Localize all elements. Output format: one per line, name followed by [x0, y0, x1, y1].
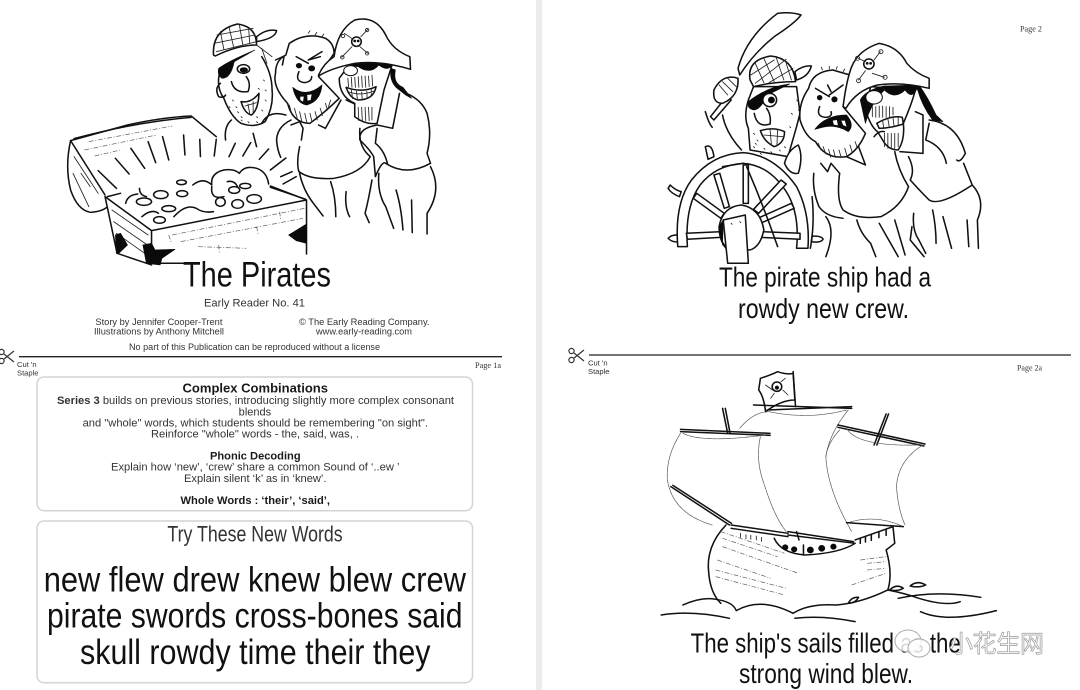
icon: pirate with cap and eyepatch	[213, 24, 286, 147]
icon: scissors	[0, 349, 14, 364]
heading: complex combinations: Complex Combinations	[182, 381, 328, 395]
cut label: Staple	[588, 367, 610, 376]
body text: series description: Series 3 builds on previous stories, introducing slightly more complex consonant	[57, 395, 454, 407]
body text: reinforce: Reinforce "whole" words - the, said, was, .	[151, 428, 359, 440]
word row 3: skull rowdy time their they	[80, 633, 431, 672]
watermark	[895, 630, 1044, 658]
cut label: Staple	[17, 368, 39, 378]
page number: Page 2	[1020, 25, 1042, 34]
whole words line: Whole Words : ‘their’, ‘said’,	[180, 495, 330, 507]
icon: waves	[661, 583, 996, 622]
page number: Page 2a	[1017, 364, 1042, 373]
panel: try these new words	[37, 521, 472, 683]
icon: scissors	[569, 348, 584, 363]
panel: page 2	[668, 13, 1042, 324]
body text: phonics: Explain how ‘new’, ‘crew’ share a common Sound of ‘..ew ’	[111, 462, 400, 474]
cut line: right page	[569, 348, 1071, 376]
body text: whole words: and "whole" words, which students should be remembering "on sight".	[83, 417, 428, 429]
heading: try these new words: Try These New Words	[167, 522, 343, 547]
icon: bald pirate shouting	[800, 66, 865, 218]
panel: teaching notes	[37, 377, 472, 511]
icon: ship's wheel	[668, 146, 823, 263]
licence notice: No part of this Publication can be reproduced without a license	[129, 342, 380, 352]
illustration: pirate ship	[661, 372, 996, 622]
cut line: left page	[0, 349, 502, 378]
cut label: Cut 'n	[588, 359, 608, 368]
credits: author: Story by Jennifer Cooper-Trent	[95, 317, 223, 327]
body text: silent k: Explain silent ‘k’ as in ‘knew’.	[184, 473, 326, 485]
word row 2: pirate swords cross-bones said	[47, 597, 462, 636]
panel: cover page	[68, 19, 436, 352]
icon: open treasure chest	[68, 116, 307, 265]
icon: pirate captain grimacing	[826, 43, 981, 257]
caption line 2: rowdy new crew.	[738, 293, 909, 324]
icon: chat bubbles	[895, 630, 930, 657]
title: The Pirates	[183, 256, 331, 295]
caption line 2: strong wind blew.	[739, 658, 913, 689]
subtitle: Early Reader No. 41	[204, 298, 305, 310]
caption line 1: The ship's sails filled as the	[691, 628, 961, 659]
illustration: angry pirates at ship's wheel	[668, 13, 981, 263]
watermark text: 小花生网	[949, 631, 1044, 658]
icon: sails and rigging	[667, 405, 925, 532]
credits: illustrator: Illustrations by Anthony Mitchell	[94, 326, 224, 336]
icon: cutlass	[705, 13, 801, 150]
credits: copyright: © The Early Reading Company.	[299, 317, 430, 327]
icon: pirate with cap	[746, 56, 811, 174]
page number: Page 1a	[475, 361, 501, 370]
word row 1: new flew drew knew blew crew	[44, 561, 467, 600]
icon: bald pirate grinning	[275, 31, 372, 223]
icon: ship hull	[708, 525, 895, 603]
icon: pirate flag	[759, 372, 796, 412]
credits: website: www.early-reading.com	[315, 326, 412, 336]
cut label: Cut 'n	[17, 360, 37, 369]
caption line 1: The pirate ship had a	[719, 262, 931, 293]
icon: pirate captain with tricorn hat	[319, 19, 436, 234]
panel: page 2a	[661, 372, 996, 689]
body text continuation: blends	[239, 406, 272, 418]
illustration: pirates and treasure chest	[68, 19, 436, 265]
heading: phonic decoding: Phonic Decoding	[210, 450, 301, 462]
